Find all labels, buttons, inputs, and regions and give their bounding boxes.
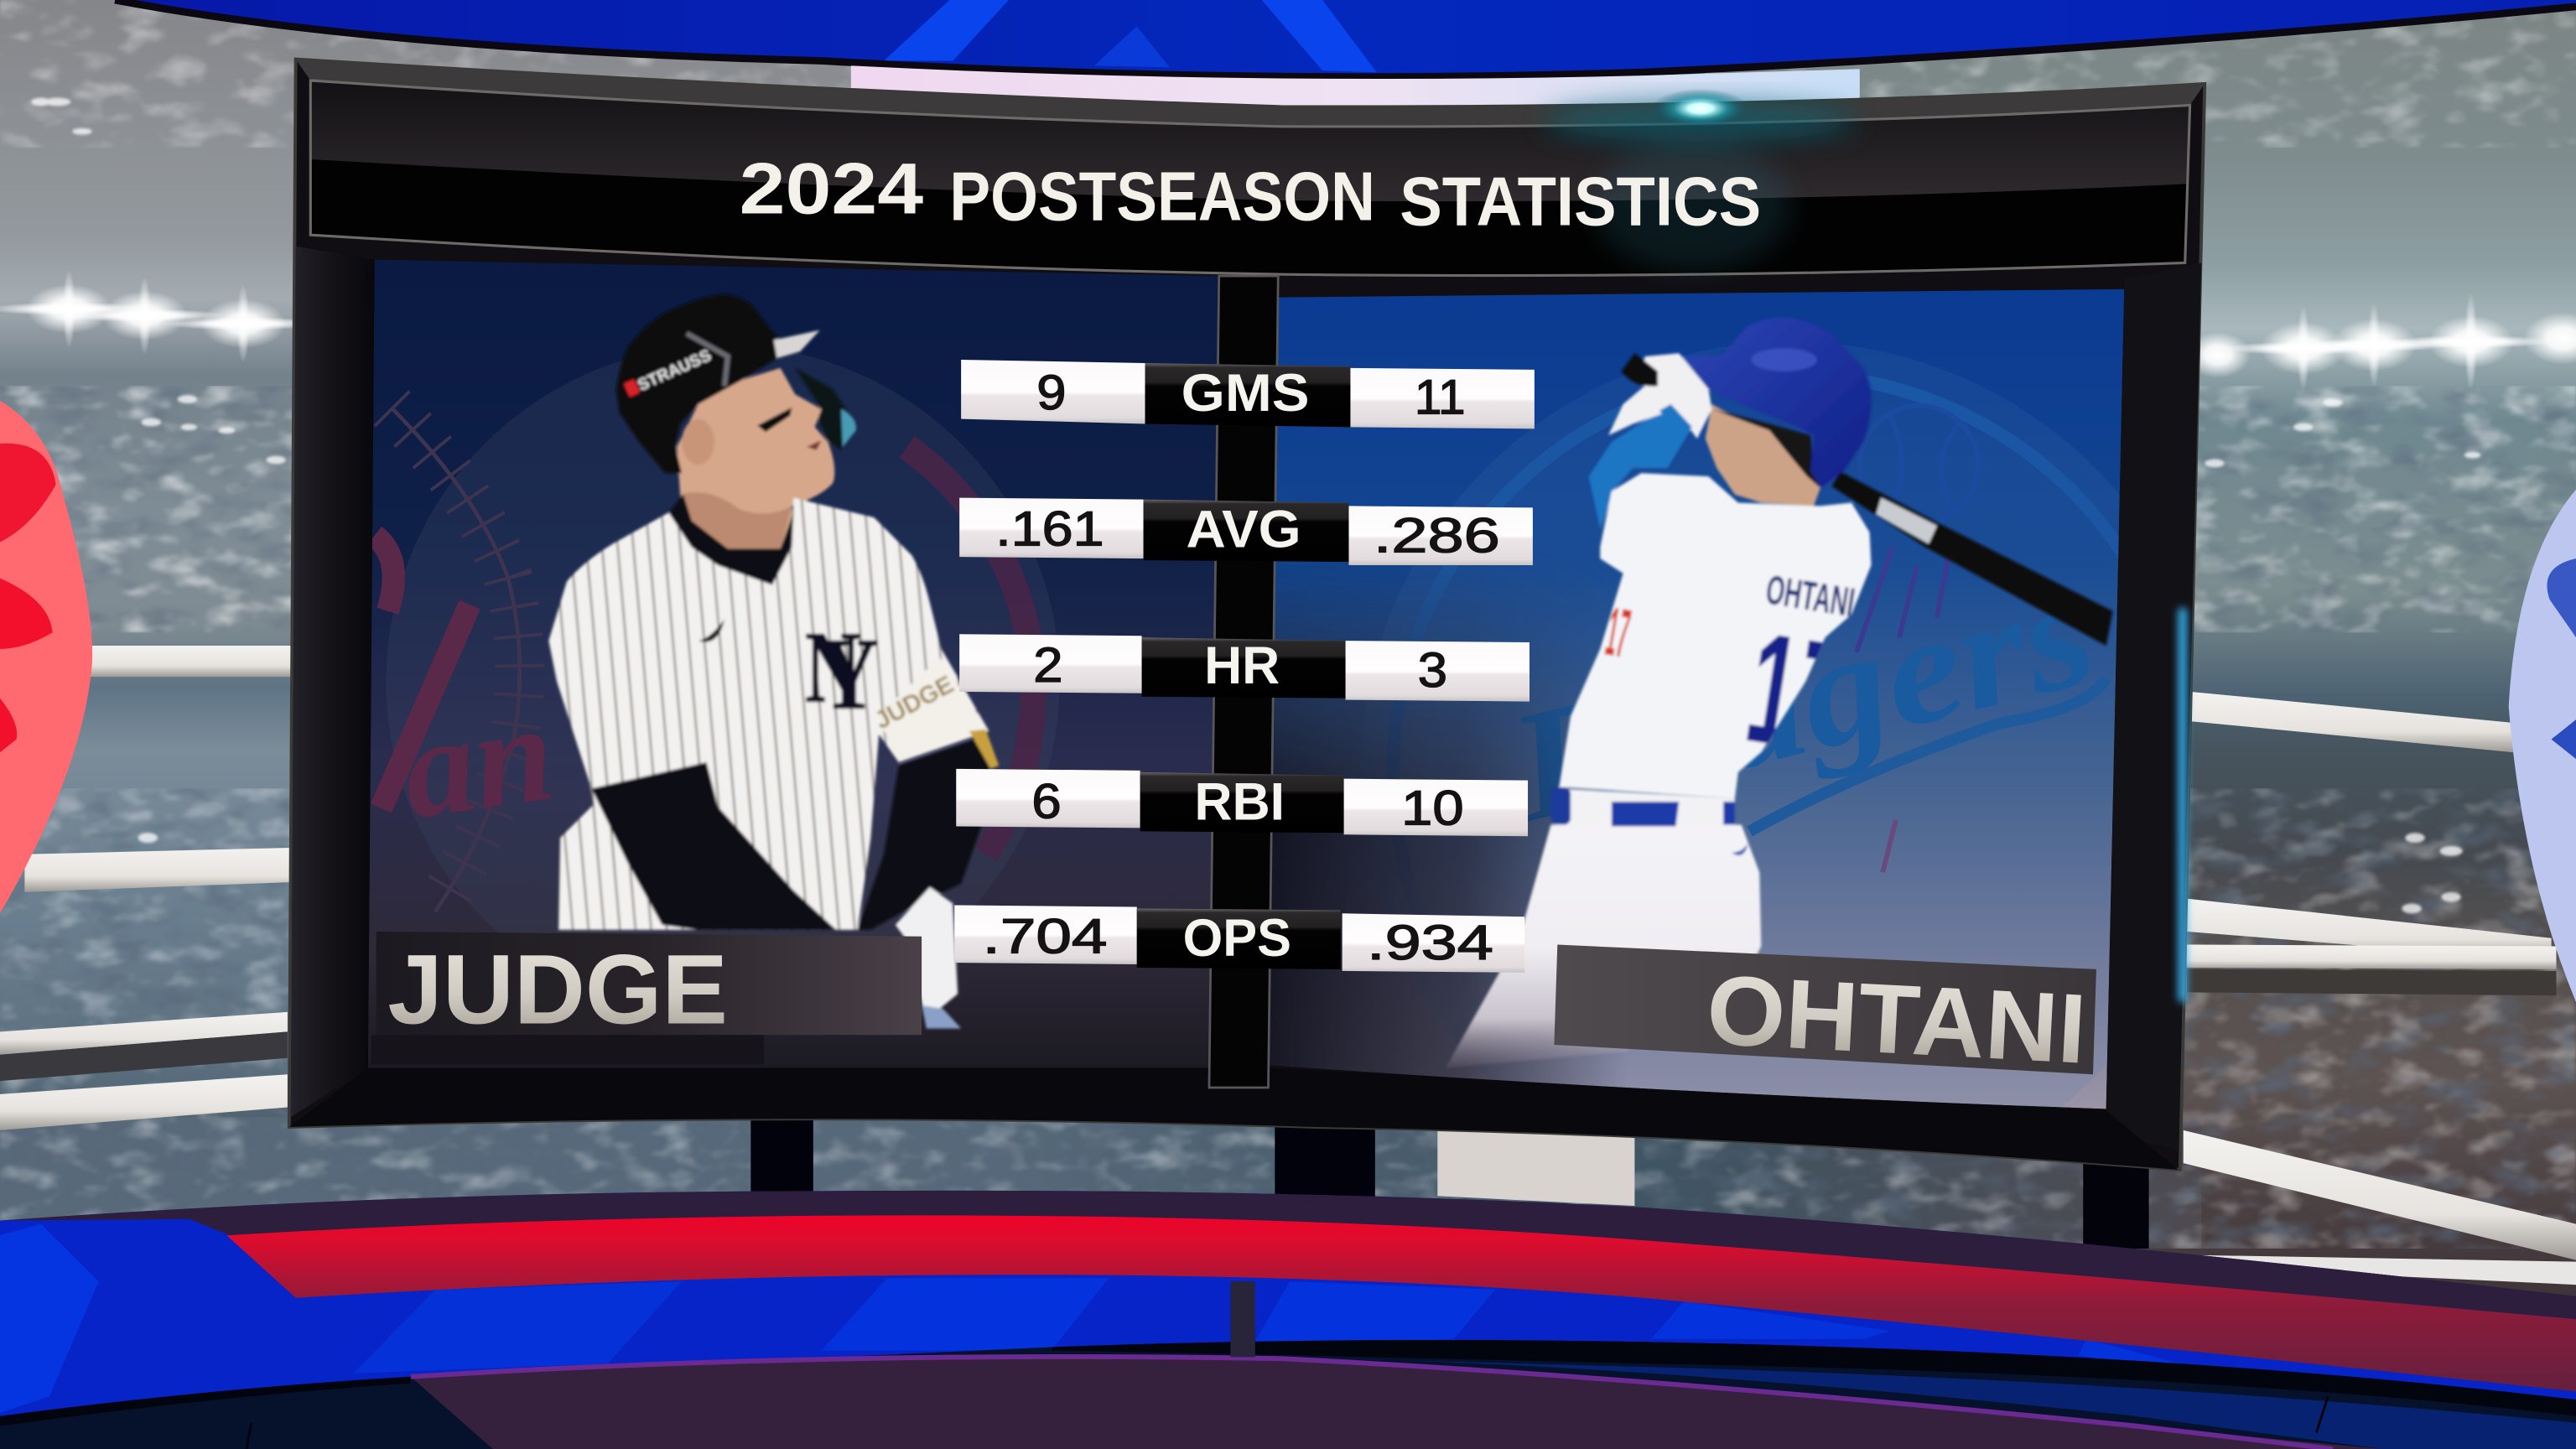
Judge face and neck xyxy=(677,368,834,548)
baseball outline in logo xyxy=(1860,406,1978,524)
player: Judge xyxy=(548,294,999,1028)
blue ball mascot right edge xyxy=(2509,490,2576,1002)
sleeve wrist cuff xyxy=(1659,404,1692,437)
Yankees NY logo: N xyxy=(805,612,861,724)
row: games: 9 xyxy=(1036,366,1067,420)
row: games: GMS xyxy=(1182,364,1309,423)
jersey name: OHTANI xyxy=(1763,568,1857,626)
Dodgers script wordmark: Dodgers xyxy=(1493,544,2110,855)
Nike swoosh xyxy=(699,620,724,642)
helmet sponsor decal: STRAUSS xyxy=(635,346,714,395)
stadium lights left xyxy=(0,269,325,363)
monitor with stat graphic xyxy=(289,60,2221,1202)
support posts below monitor xyxy=(750,1117,2149,1249)
row: batting average: .286 xyxy=(1374,508,1500,563)
Ohtani face xyxy=(1706,404,1820,506)
Ohtani jersey xyxy=(1559,473,1872,798)
top blue banner xyxy=(115,0,2576,77)
Judge arm band xyxy=(870,657,999,769)
crowd highlights xyxy=(31,98,2480,913)
helmet brim xyxy=(774,330,820,358)
Yankees script wordmark: an xyxy=(393,673,563,849)
Judge left undersleeve xyxy=(591,762,836,930)
arena rails xyxy=(0,646,2576,1285)
Ohtani hair xyxy=(1711,409,1820,488)
Ohtani helmet xyxy=(1682,317,1872,488)
row: home runs: HR xyxy=(1204,636,1280,695)
row: home runs xyxy=(959,634,1530,702)
Dodgers swash xyxy=(1750,678,2106,831)
row: on-base plus slugging xyxy=(954,906,1524,973)
Judge helmet xyxy=(616,294,800,473)
Ohtani belt xyxy=(1550,787,1748,855)
title: POSTSEASON xyxy=(949,159,1375,236)
player: Ohtani xyxy=(1446,317,2113,1067)
desk blue stripes xyxy=(0,1224,2366,1413)
desk base blue xyxy=(0,1191,2576,1449)
Yankees logo disc xyxy=(386,354,1057,936)
row: runs batted in: 10 xyxy=(1401,782,1464,836)
row: home runs: 2 xyxy=(1033,638,1063,693)
Judge neck shading xyxy=(680,492,792,548)
baseball stitches xyxy=(391,408,520,911)
row: runs batted in xyxy=(956,769,1528,836)
Yankees logo red arc xyxy=(906,447,1033,854)
desk front panel xyxy=(411,1357,2382,1449)
title: STATISTICS xyxy=(1400,164,1761,240)
panel: Dodgers side background xyxy=(1270,289,2125,1109)
glow on monitor right edge xyxy=(2179,608,2187,1002)
Judge jersey xyxy=(548,498,989,930)
Yankees script Y stroke xyxy=(375,536,470,808)
Yankees NY logo: Y xyxy=(818,618,879,730)
desk centre seam xyxy=(1230,1281,1255,1357)
backlit lavender strip xyxy=(851,65,1860,109)
row: on-base plus slugging: .704 xyxy=(983,909,1107,963)
red ball mascot left edge xyxy=(0,401,92,913)
title: 2024 xyxy=(740,149,923,230)
Judge collar xyxy=(668,495,793,584)
Judge name: JUDGE xyxy=(387,935,728,1045)
player: Ohtani: 17 xyxy=(1601,594,1635,673)
row: batting average: .161 xyxy=(995,501,1104,556)
panel: Yankees side background xyxy=(368,260,1219,1067)
right pillar xyxy=(2106,262,2201,1150)
bat knob xyxy=(1622,353,1658,387)
Judge right undersleeve xyxy=(858,738,989,930)
stat table xyxy=(954,360,1535,973)
lower blue trim xyxy=(1281,1357,2576,1449)
title band xyxy=(310,80,2190,276)
desk top dark band xyxy=(0,1191,2576,1319)
name plate: Judge xyxy=(371,932,922,1065)
monitor top bevel xyxy=(296,60,2205,127)
row: on-base plus slugging: OPS xyxy=(1183,909,1291,968)
row: games: 11 xyxy=(1415,371,1466,425)
left pillar xyxy=(291,247,375,1117)
frame bottom band xyxy=(289,1067,2179,1170)
Ohtani bat xyxy=(1831,471,2113,646)
Judge eye black xyxy=(757,408,792,432)
Ohtani pants xyxy=(1446,825,1761,1067)
baseball speed streaks xyxy=(1857,547,1949,872)
row: on-base plus slugging: .934 xyxy=(1367,916,1493,970)
Judge glove xyxy=(896,887,961,1028)
Ohtani name: OHTANI xyxy=(1704,954,2089,1084)
name plate: Ohtani xyxy=(1554,945,2096,1084)
studio desk xyxy=(0,1191,2576,1449)
lower dark shadow band xyxy=(0,1340,2576,1449)
helmet highlight xyxy=(687,334,728,386)
Judge far ear flap xyxy=(795,368,856,450)
row: batting average xyxy=(959,498,1533,565)
Dodgers logo ring xyxy=(1360,342,2221,1202)
Judge ear xyxy=(682,419,714,465)
row: games xyxy=(961,360,1535,428)
monitor frame xyxy=(289,60,2205,1170)
dark fade beside centre column xyxy=(1265,543,1627,1101)
row: home runs: 3 xyxy=(1418,643,1447,698)
row: batting average: AVG xyxy=(1187,500,1301,558)
cyan glow on monitor top xyxy=(1545,89,1857,271)
jersey number: 17 xyxy=(1736,599,1858,787)
row: runs batted in: RBI xyxy=(1194,773,1285,832)
centre column xyxy=(1209,276,1278,1088)
Ohtani blue sleeve xyxy=(1589,404,1692,529)
red stripe xyxy=(226,1215,2576,1391)
desk base seams xyxy=(247,1423,252,1449)
Judge mouth xyxy=(807,440,822,450)
Ohtani gloves xyxy=(1608,353,1711,439)
row: runs batted in: 6 xyxy=(1031,775,1062,829)
Judge arm band: JUDGE xyxy=(870,670,958,735)
stadium lights right xyxy=(2185,293,2576,391)
title xyxy=(740,149,1761,240)
